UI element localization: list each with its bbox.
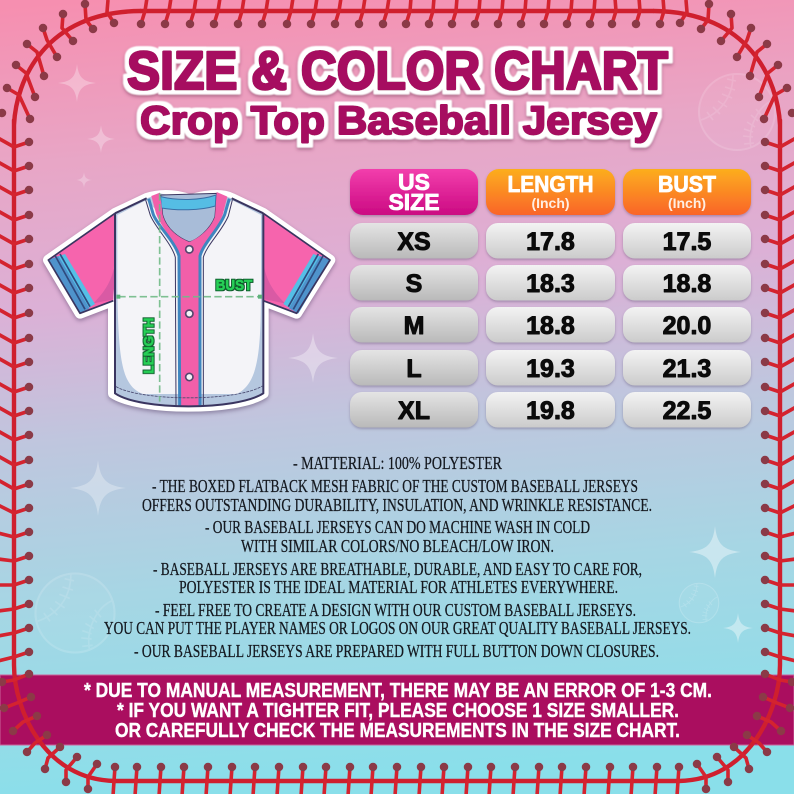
table values: S	[406, 270, 422, 298]
inner neck	[161, 193, 217, 242]
table values: 22.5	[663, 397, 711, 425]
disclaimer banner	[0, 675, 794, 745]
table values: 17.8	[526, 228, 575, 256]
label: bust: BUST	[216, 278, 252, 294]
table values: 17.5	[663, 228, 711, 256]
size chart table: SIZE	[388, 189, 440, 215]
hem stitching and outline	[116, 386, 262, 398]
size chart table	[350, 169, 751, 428]
product description text: POLYESTER IS THE IDEAL MATERIAL FOR ATHLETES EVERYWHERE.	[179, 577, 618, 597]
disclaimer banner: OR CAREFULLY CHECK THE MEASUREMENTS IN THE SIZE CHART.	[115, 720, 680, 742]
table values: 19.3	[526, 355, 575, 383]
subtitle: Crop Top Baseball Jersey	[140, 99, 658, 143]
table values: XS	[397, 228, 431, 256]
size chart table: BUST	[658, 171, 716, 197]
right sleeve	[263, 213, 330, 313]
icon: baseball jersey with measurement lines	[48, 192, 330, 407]
jersey body	[115, 193, 263, 406]
label: length: LENGTH	[140, 318, 156, 374]
buttons	[186, 246, 193, 381]
size chart table: LENGTH	[508, 171, 594, 197]
table values: M	[404, 312, 424, 340]
product description text: - THE BOXED FLATBACK MESH FABRIC OF THE CUSTOM BASEBALL JERSEYS	[152, 476, 638, 496]
size chart table: (Inch)	[668, 195, 706, 211]
size chart table: US	[398, 169, 430, 195]
sticker outline	[48, 195, 330, 406]
table values: 20.0	[663, 312, 711, 340]
product description text	[104, 453, 691, 661]
table values: XL	[398, 397, 430, 425]
product description text: - BASEBALL JERSEYS ARE BREATHABLE, DURABLE, AND EASY TO CARE FOR,	[153, 559, 642, 579]
product description text: - FEEL FREE TO CREATE A DESIGN WITH OUR CUSTOM BASEBALL JERSEYS.	[155, 600, 636, 620]
collar band	[161, 195, 216, 210]
table values: 18.8	[663, 270, 711, 298]
product description text: WITH SIMILAR COLORS/NO BLEACH/LOW IRON.	[241, 536, 554, 556]
table values: 21.3	[663, 355, 711, 383]
table cells	[350, 223, 751, 428]
sparkles and faint baseballs	[35, 64, 775, 653]
left sleeve	[48, 213, 115, 313]
table values	[397, 228, 711, 425]
placket	[151, 192, 227, 407]
table values: 18.3	[526, 270, 575, 298]
table values: 18.8	[526, 312, 575, 340]
disclaimer banner: * DUE TO MANUAL MEASUREMENT, THERE MAY BE AN ERROR OF 1-3 CM.	[84, 680, 712, 702]
table values: 19.8	[526, 397, 575, 425]
size chart table: (Inch)	[531, 195, 570, 211]
table values: L	[406, 355, 422, 383]
product description text: - MATTERIAL: 100% POLYESTER	[293, 453, 502, 473]
measurement lines	[118, 193, 260, 402]
table header	[350, 169, 751, 215]
disclaimer banner: * IF YOU WANT A TIGHTER FIT, PLEASE CHOOSE 1 SIZE SMALLER.	[117, 700, 679, 722]
product description text: - OUR BASEBALL JERSEYS CAN DO MACHINE WASH IN COLD	[205, 517, 590, 537]
title: SIZE & COLOR CHART	[127, 41, 668, 101]
